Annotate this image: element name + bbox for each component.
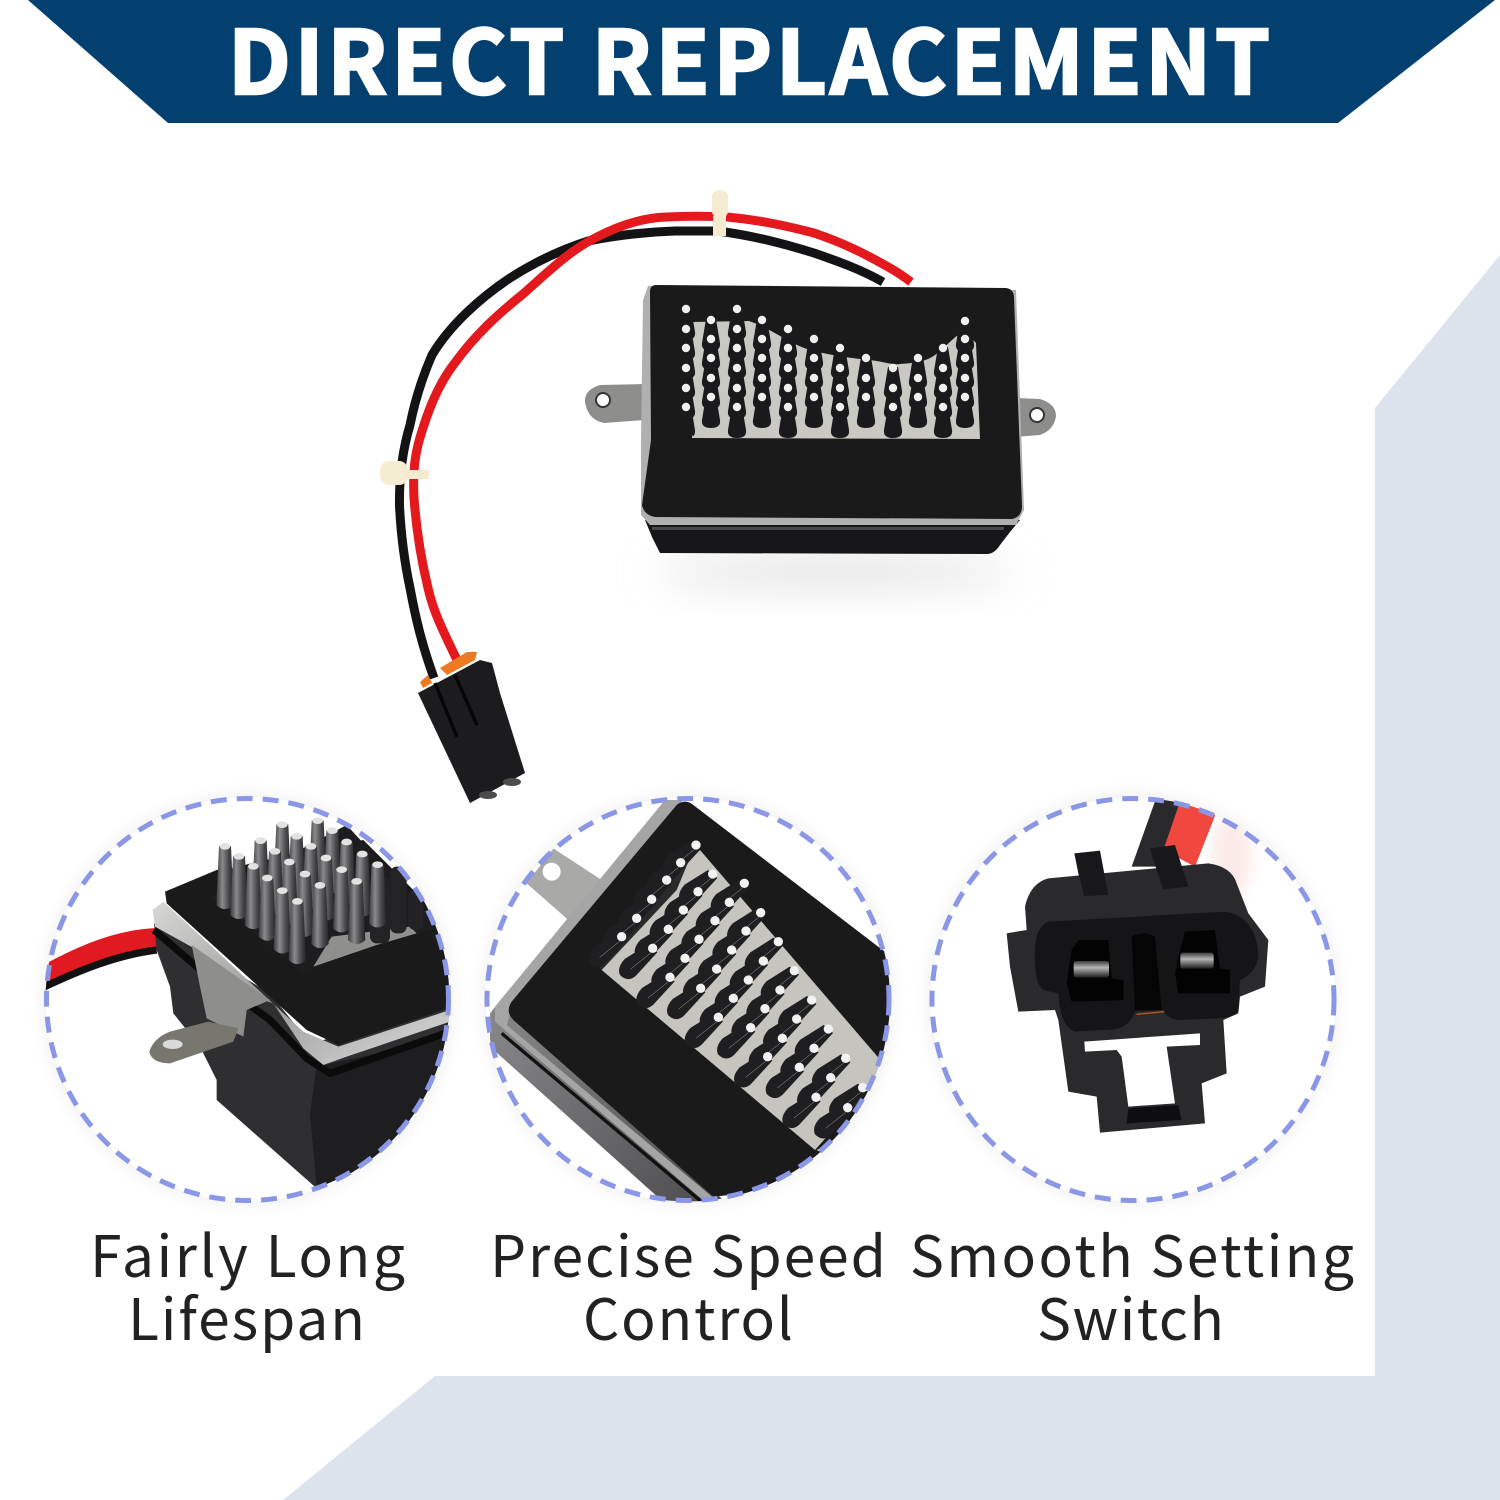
connector shell xyxy=(1007,863,1268,1133)
metal edge xyxy=(495,800,720,1203)
top cable tie xyxy=(712,190,728,236)
caption: precise speed control: Control xyxy=(583,1275,793,1357)
housing seam xyxy=(502,1033,703,1203)
right socket xyxy=(1175,930,1230,993)
module housing xyxy=(641,286,1024,554)
wires xyxy=(43,938,157,987)
mounting lug xyxy=(149,1022,238,1063)
foam gasket xyxy=(642,285,1022,519)
left mounting lug xyxy=(585,384,645,423)
foam xyxy=(165,840,453,1045)
caption: fairly long lifespan: Fairly Long xyxy=(90,1212,405,1294)
caption: precise speed control: Precise Speed xyxy=(490,1212,886,1294)
metal window xyxy=(588,840,883,1150)
caption: fairly long lifespan xyxy=(90,1212,405,1357)
mounting lug xyxy=(527,848,602,920)
left cable tie xyxy=(380,461,429,485)
latch opening xyxy=(1084,1033,1200,1107)
top tab right xyxy=(1150,845,1188,889)
detail circle: fairly long lifespan xyxy=(43,796,453,1204)
dashed ring xyxy=(46,798,448,1200)
housing xyxy=(490,997,723,1220)
dashed ring xyxy=(932,798,1334,1200)
dark gasket line xyxy=(154,930,450,1073)
pin cluster xyxy=(216,817,386,964)
top tab left xyxy=(1074,851,1108,896)
center slot xyxy=(1132,933,1162,1010)
caption: smooth setting switch: Smooth Setting xyxy=(910,1212,1354,1294)
metal flange xyxy=(153,902,450,1065)
caption: smooth setting switch xyxy=(910,1212,1354,1357)
caption: precise speed control xyxy=(490,1212,886,1357)
background panel xyxy=(283,255,1500,1500)
detail circle: precise speed control xyxy=(484,796,893,1220)
copper detail xyxy=(1137,1012,1164,1014)
header banner xyxy=(28,0,1495,123)
white gap behind pins xyxy=(232,862,254,868)
lug hole xyxy=(163,1040,183,1049)
latch shadow xyxy=(1127,1105,1182,1123)
right housing face xyxy=(310,1037,453,1188)
foam xyxy=(509,802,893,1197)
caption: smooth setting switch: Switch xyxy=(1037,1275,1224,1357)
resistor window xyxy=(677,305,980,439)
pin well xyxy=(303,826,436,928)
connector xyxy=(418,652,525,803)
pins xyxy=(588,840,867,1139)
pale metal at pin bases xyxy=(313,927,417,967)
left socket xyxy=(1067,940,1123,1002)
main product photo: resistor with wiring harness xyxy=(380,190,1056,803)
connector face xyxy=(1035,912,1258,1032)
dark rear pins xyxy=(370,867,423,943)
dashed ring xyxy=(487,798,889,1200)
red wire xyxy=(414,216,911,662)
shadow under module xyxy=(655,556,1015,588)
detail circle: smooth setting switch xyxy=(929,796,1337,1204)
wires xyxy=(1132,797,1217,867)
pink glow xyxy=(1212,817,1252,897)
right mounting lug xyxy=(1015,398,1056,437)
pins grid xyxy=(677,305,974,438)
bracket xyxy=(192,945,270,1037)
housing xyxy=(154,923,453,1188)
black wire xyxy=(399,231,883,678)
caption: fairly long lifespan: Lifespan xyxy=(128,1275,365,1357)
